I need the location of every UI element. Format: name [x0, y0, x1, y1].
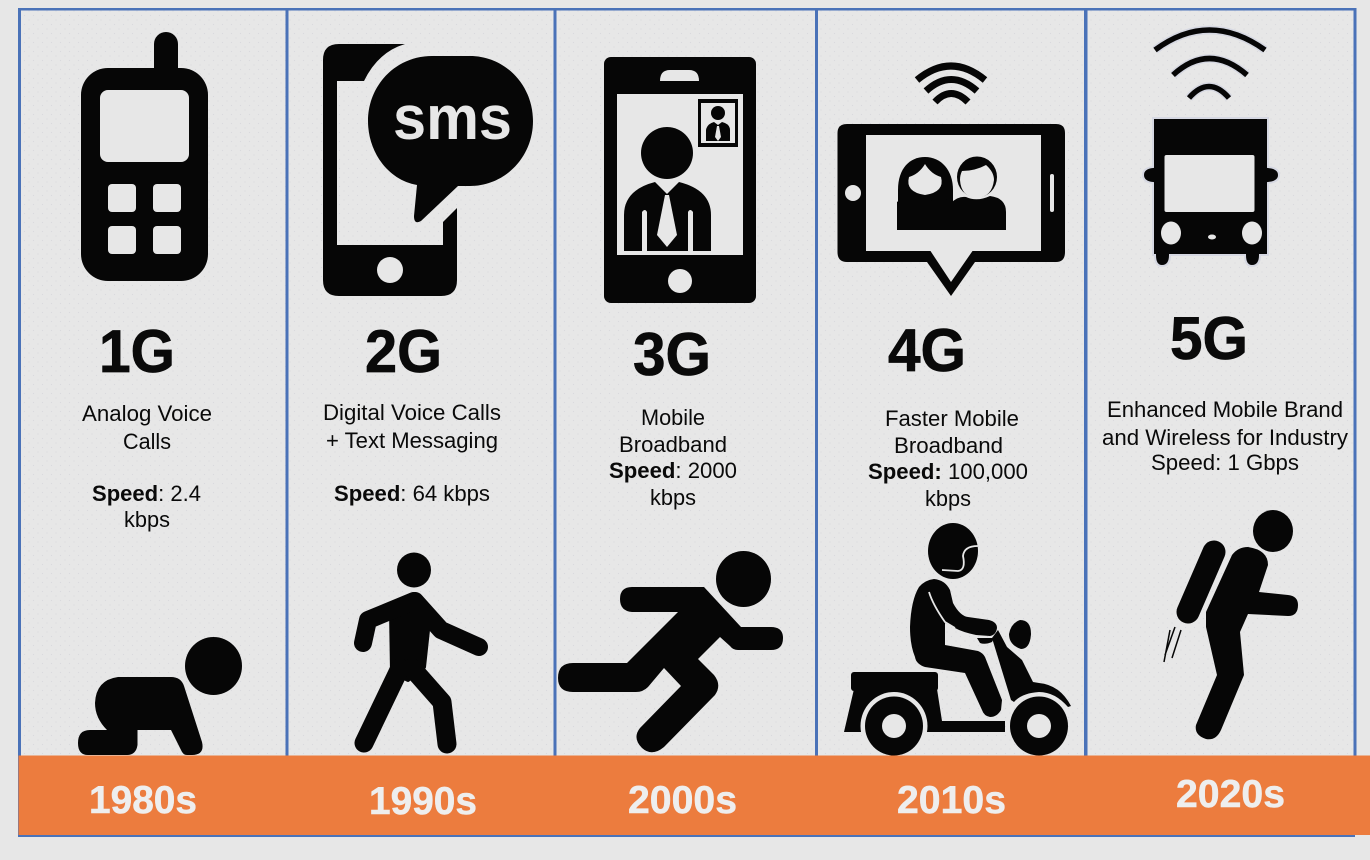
- icon: walking person: [363, 552, 479, 744]
- text: 3G description: Broadband: [619, 432, 727, 457]
- text: 5G description: Enhanced Mobile Brand: [1107, 397, 1343, 422]
- icon: phone with video chat: [838, 124, 1065, 296]
- text: 1G description: Analog Voice: [82, 401, 212, 426]
- icon: running person: [558, 551, 783, 752]
- heading: 3G: 3G: [633, 321, 711, 388]
- text: 1G description: kbps: [124, 507, 170, 532]
- panel: 1G: [78, 32, 242, 755]
- text: 2G description: + Text Messaging: [326, 428, 498, 453]
- label: 1980s: 1980s: [89, 779, 197, 822]
- text: 5G description: Speed: 1 Gbps: [1151, 450, 1299, 475]
- icon: autonomous bus: [1143, 118, 1279, 266]
- text: 1G description: [82, 401, 212, 532]
- text: 4G description: Faster Mobile: [885, 406, 1019, 431]
- heading: 2G: 2G: [365, 318, 442, 385]
- text: 3G description: [609, 405, 737, 510]
- text: 4G description: kbps: [925, 486, 971, 511]
- panel: 3G: [558, 57, 783, 752]
- icon: phone with video call: [604, 57, 756, 303]
- icon: analog cell phone: [81, 32, 208, 281]
- panel: 5G: [1102, 30, 1348, 739]
- icon: phone with sms bubble: [323, 44, 533, 296]
- icon: crawling baby: [78, 637, 242, 755]
- label: 2020s: 2020s: [1176, 773, 1285, 816]
- orange timeline bar: [18, 756, 1370, 835]
- text: 4G description: [868, 406, 1028, 511]
- panel: 4G: [838, 66, 1071, 760]
- text: 3G description: Mobile: [641, 405, 705, 430]
- text: 4G description: Speed: 100,000: [868, 459, 1028, 484]
- heading: 4G: 4G: [888, 317, 966, 384]
- icon: scooter rider: [844, 523, 1071, 760]
- text: 1G description: Speed: 2.4: [92, 481, 201, 506]
- label: 2000s: 2000s: [628, 779, 737, 822]
- text: 2G description: [323, 400, 501, 506]
- text: 1G description: Calls: [123, 429, 171, 454]
- icon: wifi signal: [1155, 30, 1265, 98]
- label: 1990s: 1990s: [369, 780, 477, 823]
- panel: 2G: [323, 44, 533, 744]
- text: 3G description: Speed: 2000: [609, 458, 737, 483]
- heading: 1G: 1G: [99, 318, 175, 385]
- text: 2G description: Speed: 64 kbps: [334, 481, 490, 506]
- text: 5G description: [1102, 397, 1348, 475]
- text: 5G description: and Wireless for Industry: [1102, 425, 1348, 450]
- text: 4G description: Broadband: [894, 433, 1003, 458]
- text: 2G description: Digital Voice Calls: [323, 400, 501, 425]
- icon: wifi signal: [917, 66, 985, 102]
- text: 3G description: kbps: [650, 485, 696, 510]
- label: 2010s: 2010s: [897, 779, 1006, 822]
- icon: jetpack person: [1164, 510, 1298, 739]
- icon: phone with sms bubble: sms: [393, 84, 512, 153]
- heading: 5G: 5G: [1170, 305, 1248, 372]
